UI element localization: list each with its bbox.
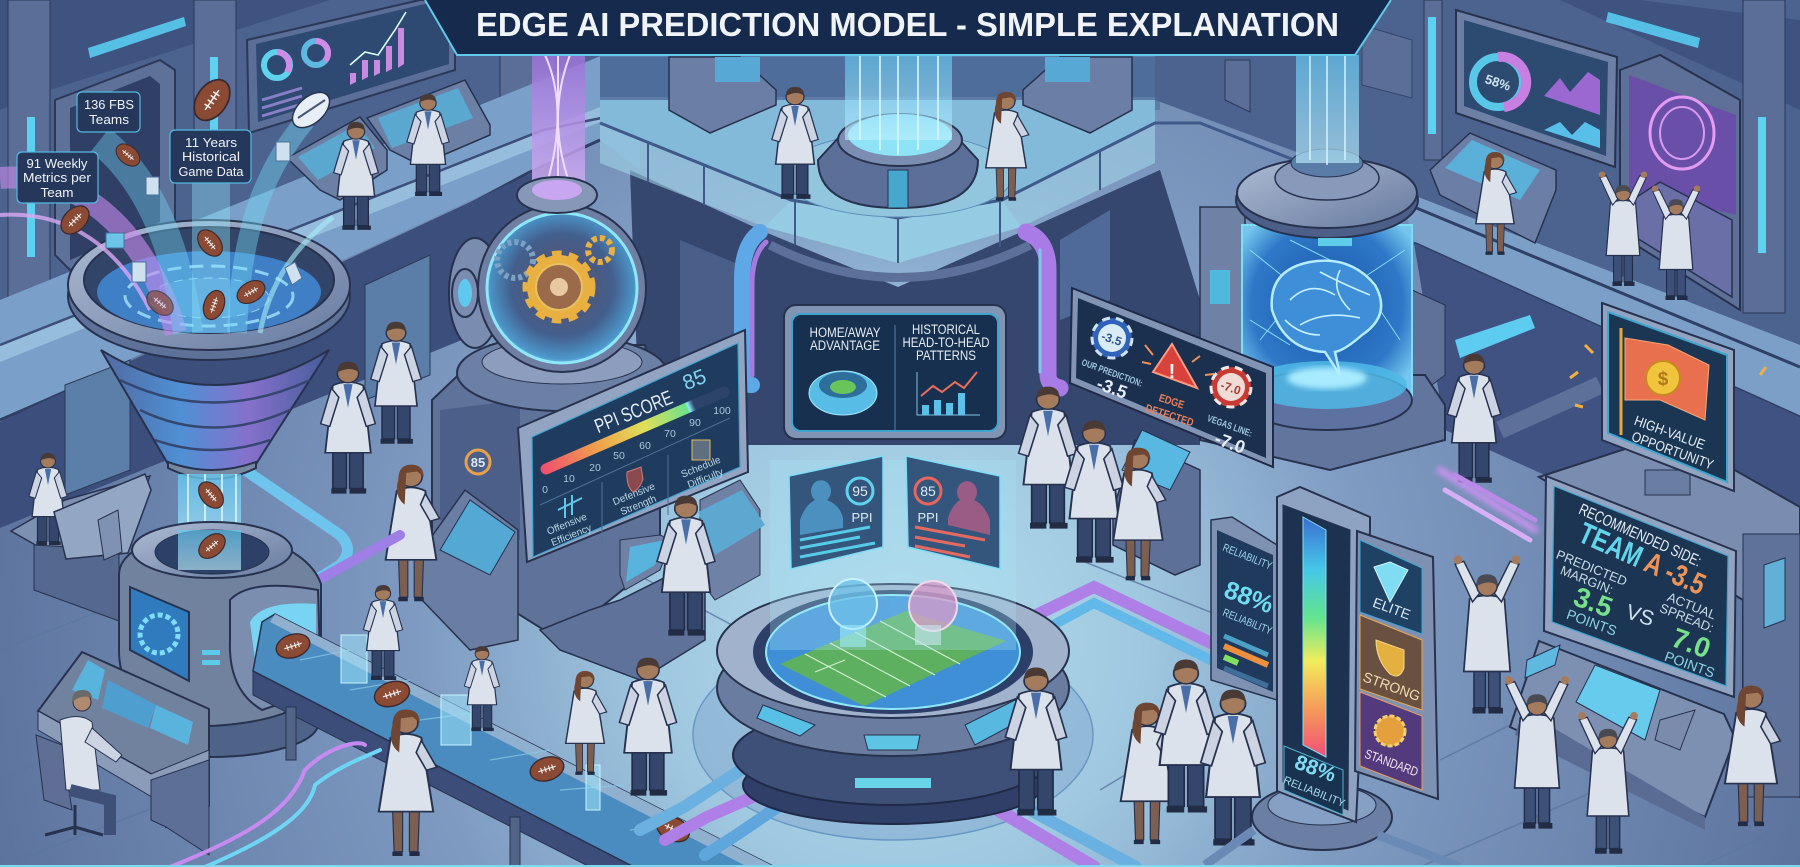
- brain tank right wall: [1155, 0, 1800, 345]
- text: recommended side: RECOMMENDED SIDE:: [1576, 501, 1704, 570]
- icon: red chip: [1211, 367, 1251, 407]
- label PPI: PPI: [918, 510, 938, 525]
- text: predicted margin: PREDICTED: [1554, 547, 1629, 589]
- points label: POINTS: [1564, 606, 1619, 639]
- table technician: [1005, 668, 1067, 816]
- tall console near edge panel: [1113, 430, 1200, 575]
- gauge ticks: 10: [563, 473, 575, 485]
- gauge ticks: 20: [589, 462, 601, 474]
- pedestal pipes: [1205, 830, 1460, 867]
- icon: blue chip: [1092, 318, 1132, 358]
- tier: elite: [1360, 540, 1422, 634]
- piping behind tank: [245, 470, 400, 590]
- kiosk console and woman: [386, 465, 518, 650]
- panel text: advantage: ADVANTAGE: [810, 338, 880, 353]
- silhouette: [948, 481, 990, 535]
- stat bars: [800, 527, 875, 557]
- panel: left reliability card: RELIABILITY: [1221, 607, 1274, 638]
- tier: standard: STANDARD: [1363, 746, 1420, 779]
- left wall with door and monitors: [0, 0, 640, 310]
- gauge value: 85: [471, 455, 485, 470]
- text: edge: EDGE: [1157, 392, 1186, 412]
- panel text: historical: HISTORICAL: [912, 322, 980, 337]
- gauge ticks: 60: [639, 440, 651, 452]
- PPI console operator: [657, 496, 715, 636]
- text: 88% reliability: RELIABILITY: [1282, 774, 1347, 810]
- tier: standard: [1360, 692, 1422, 790]
- text: 88% reliability: 88%: [1292, 751, 1339, 787]
- text: vegas value: -7.0: [1212, 428, 1248, 458]
- sphere reactor machine: [432, 55, 667, 640]
- text: team a minus 3.5: TEAM A -3.5: [1573, 517, 1710, 602]
- reliability tower: [1211, 487, 1438, 850]
- scientists on left balcony: [334, 94, 449, 230]
- icon: golden gear: [527, 255, 591, 319]
- panel text: head-to-head: HEAD-TO-HEAD: [902, 335, 990, 350]
- icon: stadium: [809, 371, 877, 415]
- icon: glowing brain: [1272, 261, 1381, 375]
- icon: offensive: [558, 495, 582, 518]
- data pages in the air: [106, 142, 302, 285]
- vs label: VS: [1623, 601, 1657, 631]
- bottom-left operator console: [36, 652, 209, 855]
- stat bars: [915, 527, 985, 557]
- callout: 136 FBS teams: Teams: [89, 112, 130, 127]
- icon: shield: [627, 467, 643, 492]
- title text: EDGE AI PREDICTION MODEL - SIMPLE EXPLANATION: [476, 7, 1339, 44]
- text: actual spread: SPREAD:: [1658, 600, 1716, 636]
- tier: strong: STRONG: [1361, 669, 1423, 704]
- data pipes to big console: [1440, 470, 1535, 540]
- wall screen: donut and charts: [1456, 10, 1617, 167]
- silhouette: [800, 480, 843, 535]
- gauge ticks: 70: [664, 428, 676, 440]
- points label: POINTS: [1662, 648, 1717, 681]
- group at edge console: [1019, 387, 1166, 580]
- connecting pipes under platform: [742, 232, 1060, 388]
- celebrating operators and analyst: [1505, 676, 1780, 854]
- gauge ticks: [542, 405, 731, 496]
- callout: 91 weekly metrics: 91 Weekly: [26, 156, 88, 171]
- text: detected: DETECTED: [1144, 402, 1195, 429]
- data stream: history lines: [192, 183, 230, 333]
- gauge ticks: 100: [713, 405, 731, 417]
- conveyor scientists: [363, 585, 677, 856]
- text: opportunity: OPPORTUNITY: [1630, 428, 1716, 473]
- title banner: [425, 0, 1391, 55]
- lower beam under funnel: [178, 474, 241, 567]
- panel: left reliability card: [1211, 517, 1277, 700]
- hologram team card: red: [906, 456, 1000, 569]
- score 95: 95: [852, 483, 868, 499]
- dark under right balcony with pipeline: [1414, 243, 1800, 530]
- callout: 136 FBS teams: 136 FBS: [84, 97, 134, 112]
- panel: tier badges: [1355, 531, 1438, 799]
- back room wall: [600, 0, 1160, 110]
- right-side console below PPI: [540, 480, 765, 680]
- text: vegas line: VEGAS LINE:: [1206, 413, 1253, 440]
- scientists below funnel: [321, 322, 421, 494]
- platform glass rail: [600, 123, 1414, 263]
- purple wall portal: [1620, 55, 1740, 310]
- scientist at reliability tower: [1201, 689, 1265, 845]
- text: high-value: HIGH-VALUE: [1632, 412, 1707, 452]
- text: defensive strength: Strength: [619, 494, 658, 518]
- funnel: [68, 220, 350, 479]
- callout: 11 years historical: 11 Years: [185, 135, 238, 150]
- holographic field table: [640, 584, 1230, 867]
- dark arch wall under platform: [630, 170, 1200, 445]
- text: PPI value: 85: [679, 365, 710, 395]
- text: predicted margin: MARGIN:: [1558, 563, 1615, 597]
- icon: blue chip: -3.5: [1100, 329, 1124, 349]
- brain tank: [1200, 55, 1445, 470]
- balcony consoles: [287, 80, 490, 200]
- tier: strong: [1360, 615, 1423, 710]
- icon: rising bar chart: [917, 372, 980, 415]
- text: actual spread: ACTUAL: [1665, 589, 1718, 622]
- right balcony walkway: [1400, 190, 1800, 417]
- wall screen: top-left dashboard: [247, 0, 455, 133]
- console with cheering scientists: [1599, 172, 1732, 300]
- icon: warning triangle: !: [1169, 361, 1175, 383]
- text: offensive efficiency: Offensive: [546, 512, 589, 538]
- panel: left reliability card: 88%: [1220, 576, 1277, 619]
- callout: 91 weekly metrics: Metrics per: [23, 170, 92, 185]
- data stream: right lines: [237, 120, 333, 333]
- panel: home/away and head-to-head: [784, 305, 1006, 439]
- text: defensive strength: Defensive: [611, 481, 657, 508]
- upper platform floor: [600, 100, 1155, 263]
- text: schedule difficulty: Difficulty: [686, 467, 725, 491]
- processing tank: [102, 522, 321, 757]
- central top reactor with light beam: [783, 55, 1013, 217]
- data stream: team lines: [100, 140, 188, 333]
- big recommendation console: [1510, 434, 1800, 830]
- floor tile lines: [0, 560, 1800, 867]
- floor light trails: [170, 743, 380, 867]
- right wall pillar: [1743, 0, 1785, 313]
- panel: left reliability card: RELIABILITY: [1221, 542, 1274, 573]
- text: offensive efficiency: Efficiency: [550, 523, 593, 549]
- icon: warning triangle: [1142, 344, 1214, 388]
- label PPI: PPI: [852, 510, 872, 525]
- value 7.0: 7.0: [1668, 622, 1715, 664]
- hologram team card: blue: [789, 456, 883, 569]
- gauge bar: [546, 392, 724, 469]
- panel: PPI score: [518, 330, 748, 562]
- table feed pipes: [640, 587, 1230, 867]
- footballs in the air: [56, 73, 336, 323]
- text: PPI score title: PPI SCORE: [592, 387, 676, 438]
- icon: flag and coin: $: [1658, 369, 1669, 390]
- panel text: home/away advantage: HOME/AWAY: [810, 325, 880, 340]
- scientist beside tank: [1447, 354, 1501, 483]
- callout: 11 years historical: [170, 130, 251, 183]
- icon: red chip: -7.0: [1219, 378, 1243, 398]
- gauge ticks: 90: [689, 417, 701, 429]
- text: our prediction: OUR PREDICTION:: [1080, 357, 1144, 390]
- panel text: patterns: PATTERNS: [916, 348, 976, 363]
- right balcony console and woman: [1430, 133, 1556, 255]
- text: 88% reliability: [1282, 746, 1347, 815]
- gauge ticks: 50: [613, 450, 625, 462]
- panel: edge detected: [1070, 288, 1273, 467]
- back-room consoles: [669, 57, 1132, 133]
- callout: 91 weekly metrics: Team: [40, 185, 74, 200]
- data stream: purple metrics: [0, 178, 176, 333]
- callout: 136 FBS teams: [77, 92, 140, 132]
- holographic helmets: [829, 579, 957, 647]
- left balcony walkway: [0, 40, 640, 420]
- callout: 11 years historical: Historical: [182, 149, 240, 164]
- scientists beside top reactor: [772, 87, 1029, 201]
- seated operator: [36, 690, 122, 835]
- icon: flag and coin: [1621, 328, 1709, 435]
- conveyor belt: [253, 614, 775, 867]
- lower scientists near reliability: [1121, 659, 1218, 844]
- text: schedule difficulty: Schedule: [680, 455, 723, 481]
- tier: elite: ELITE: [1371, 594, 1413, 622]
- text: our prediction value: -3.5: [1094, 373, 1130, 403]
- panel: high-value flag: [1602, 303, 1734, 495]
- upper-left desk and scientist: [11, 453, 151, 621]
- value 3.5: 3.5: [1570, 581, 1617, 623]
- callout: 11 years historical: Game Data: [178, 164, 244, 179]
- under-balcony dark wall with server racks: [0, 160, 560, 528]
- callout: 91 weekly metrics: [17, 152, 98, 203]
- gradient reliability bar: [1303, 517, 1326, 757]
- donut value: 58%: [1483, 71, 1513, 94]
- icon: calendar: [692, 440, 710, 460]
- score 85: 85: [920, 483, 936, 499]
- celebrating woman: [1454, 556, 1520, 714]
- hologram light columns: [770, 460, 1016, 650]
- gauge ticks: 0: [542, 484, 548, 496]
